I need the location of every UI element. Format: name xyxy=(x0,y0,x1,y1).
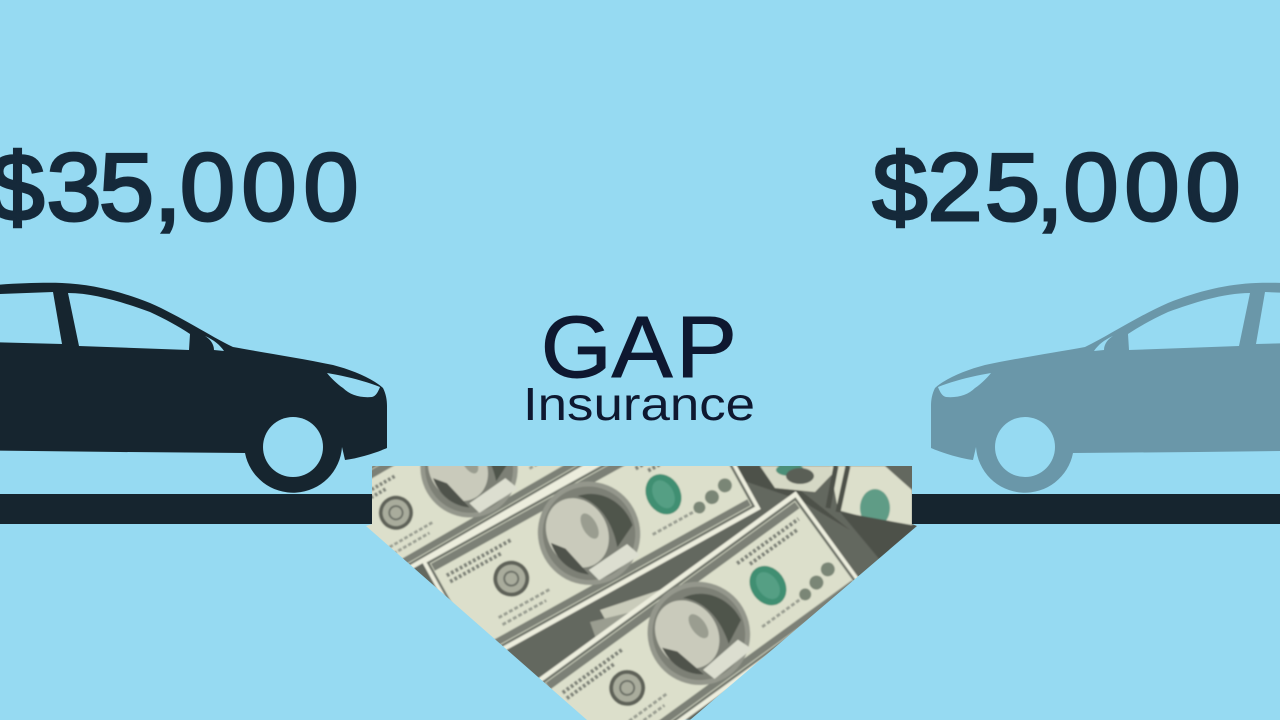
price label: $35,000: $35,000 xyxy=(0,133,359,241)
road: left segment xyxy=(0,494,372,524)
road: right segment xyxy=(912,494,1280,524)
image: pile of dollar bills filling the gap xyxy=(366,466,917,720)
icon: faded car, current value xyxy=(931,283,1280,493)
price label: $25,000: $25,000 xyxy=(873,133,1241,241)
title: GAP: GAP xyxy=(541,298,737,396)
icon: dark car, original value xyxy=(0,283,387,493)
subtitle: Insurance: Insurance xyxy=(523,378,755,430)
